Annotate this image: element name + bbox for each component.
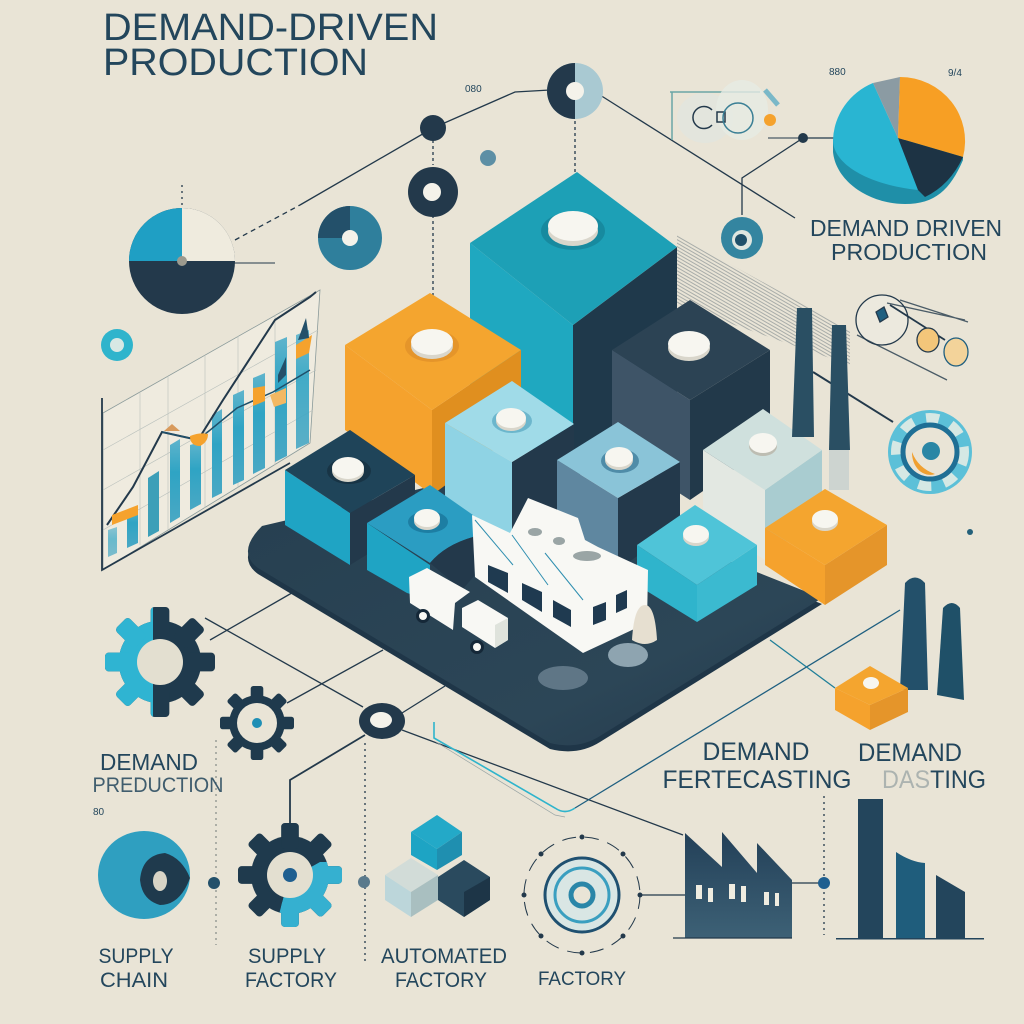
cone — [632, 605, 657, 644]
block: cyan — [637, 505, 757, 622]
bottom labels: CHAIN — [100, 969, 168, 992]
small donut left — [318, 206, 382, 270]
small number labels: 80 — [93, 807, 105, 818]
bottom labels: SUPPLY — [98, 945, 174, 968]
gear ring right — [888, 410, 972, 494]
label: demand driven production: PRODUCTION — [831, 239, 987, 265]
bottom labels: SUPPLY — [248, 945, 326, 968]
platform — [248, 470, 822, 751]
cubes icon — [385, 815, 490, 917]
label demand fertecasting — [662, 738, 852, 794]
factory silhouette — [673, 832, 792, 938]
small nodes — [408, 115, 496, 217]
label demand production: DEMAND — [100, 749, 198, 775]
bottom labels: AUTOMATED — [381, 945, 507, 968]
block: orange small — [765, 489, 887, 605]
block: orange tall — [345, 293, 521, 495]
top node — [547, 63, 603, 119]
small number labels: 880 — [829, 67, 846, 78]
label demand dasting: DEMAND — [858, 739, 962, 767]
label demand fertecasting: DEMAND — [702, 738, 810, 766]
hatching — [677, 235, 850, 365]
block: slate blue — [557, 422, 680, 570]
block: dark slate — [612, 300, 770, 500]
dots — [208, 876, 370, 889]
silos right — [900, 578, 964, 700]
bottom labels — [98, 945, 626, 992]
pie chart top right — [833, 77, 965, 204]
bar icon — [836, 799, 984, 940]
block: pale — [703, 409, 822, 560]
label: demand driven production: DEMAND DRIVEN — [810, 215, 1002, 241]
block: tall teal — [470, 172, 677, 480]
block: navy top left — [285, 430, 415, 565]
block: light blue — [445, 381, 574, 560]
label demand fertecasting: FERTECASTING — [662, 766, 852, 794]
trucks — [409, 568, 508, 654]
target icon — [522, 834, 642, 956]
node center left — [359, 703, 405, 739]
gear supply factory — [238, 823, 342, 927]
small number labels: 9/4 — [948, 68, 962, 79]
small gear — [205, 671, 309, 775]
label: demand driven production — [810, 215, 1002, 265]
title: PRODUCTION — [103, 42, 368, 84]
factory — [472, 498, 648, 653]
bottom labels: FACTORY — [538, 969, 626, 990]
title — [103, 7, 438, 84]
large gear — [105, 607, 215, 717]
small orange box — [835, 666, 908, 730]
label demand production — [92, 749, 224, 797]
towers — [792, 308, 850, 490]
sketch icon top — [670, 80, 778, 143]
bottom labels: FACTORY — [245, 969, 337, 992]
small pie left — [129, 208, 235, 314]
connector lines — [130, 90, 900, 965]
icon supply chain — [98, 831, 190, 919]
label demand dasting — [858, 739, 986, 794]
label demand dasting: DASTING — [882, 766, 986, 794]
ground blobs — [538, 643, 648, 690]
small number labels — [93, 67, 962, 818]
title: DEMAND-DRIVEN — [103, 7, 438, 49]
label demand production: PREDUCTION — [92, 774, 224, 797]
small number labels: 080 — [465, 84, 482, 95]
small cyan node — [101, 329, 133, 361]
line and bar chart — [102, 290, 320, 570]
bottom labels: FACTORY — [395, 969, 487, 992]
block: teal small — [367, 485, 475, 600]
sketch icon right — [856, 295, 968, 380]
connector node right — [721, 133, 808, 259]
